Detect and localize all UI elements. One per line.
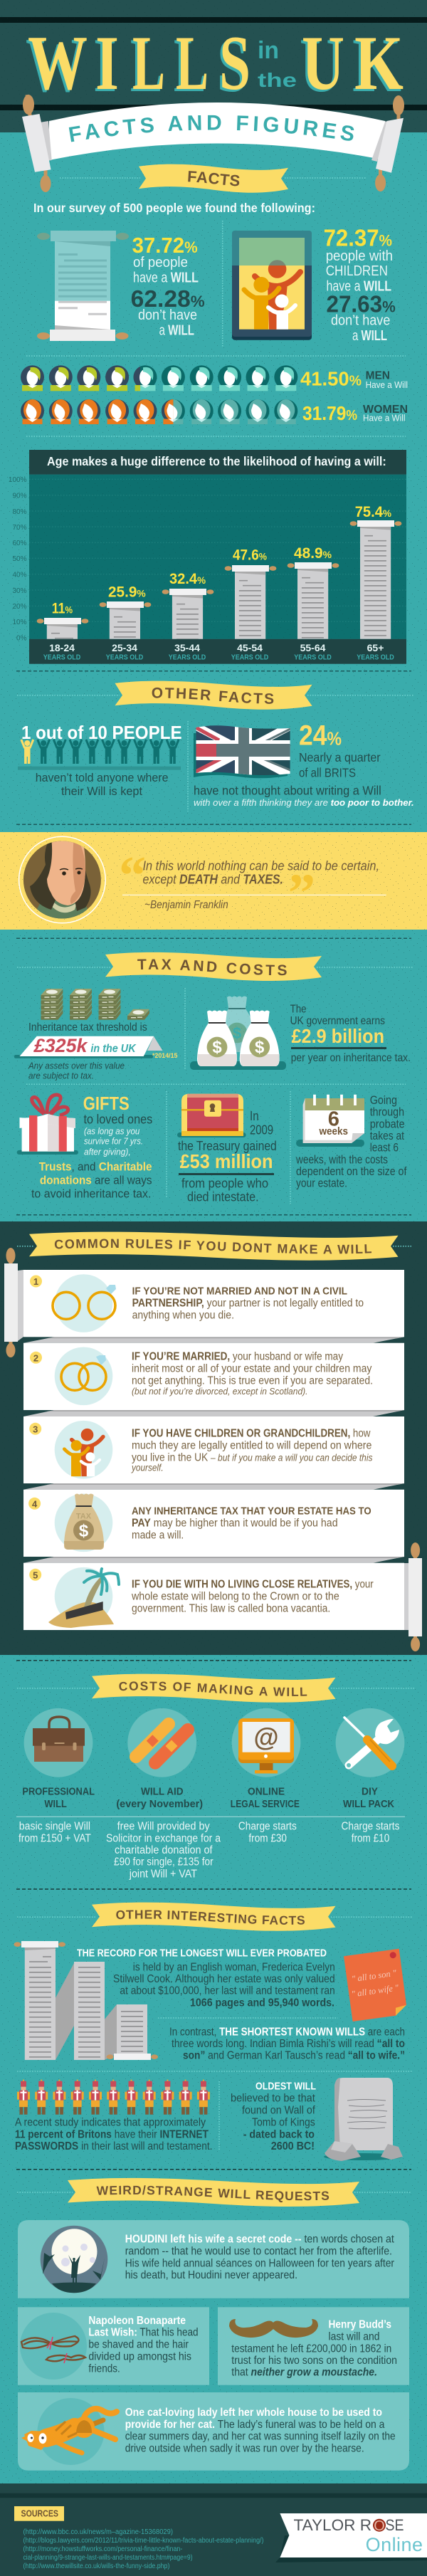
logo: Taylor Rose Online: O (374, 2518, 385, 2534)
icon: cat (21, 2409, 117, 2453)
heading banner: other interesting facts: OTHER INTERESTING FACTS (116, 1910, 305, 1925)
y axis labels (9, 476, 27, 642)
sources block: (http://www.thewillsite.co.uk/wills-the-funny-side.php) (23, 2562, 169, 2570)
stat: inheritance tax threshold: Any assets over this value (28, 1061, 125, 1071)
text: gifts trusts and charitable donations: to loved ones (84, 1113, 152, 1127)
cost option: professional will: from £150 + VAT (19, 1832, 91, 1844)
panel: Napoleon Bonaparte: be shaved and the hair (88, 2339, 189, 2351)
title: Wills in the UK: U (302, 20, 344, 106)
y axis labels: 10% (12, 619, 27, 626)
text: internet passwords: 11 percent of Britons have their INTERNET (15, 2128, 209, 2140)
icon: union flag (194, 722, 290, 779)
note: all to son, all to wife (344, 1949, 406, 2022)
title: Wills in the UK: the (258, 69, 297, 91)
panel: Henry Budd (218, 2307, 409, 2385)
cost option: will aid: Solicitor in exchange for a (106, 1832, 221, 1844)
stat: people with a will: have a WILL (133, 270, 199, 286)
panel: Henry Budd: Henry Budd’s (329, 2319, 391, 2331)
heading banner: other facts: OTHER FACTS (152, 688, 273, 704)
stat: 24 percent of Brits: of all BRITS (299, 766, 356, 780)
survey intro text: In our survey of 500 people we found the following: (33, 201, 315, 215)
rule 5: no close relatives (23, 1563, 404, 1630)
cost option: diy will pack: DIY (362, 1786, 378, 1798)
text: shortest wills (169, 2026, 405, 2062)
rule 4: inheritance tax: $ (79, 1522, 89, 1540)
quote: Benjamin Franklin: except DEATH and TAXES. (142, 872, 283, 887)
heading banner: costs of making a will (17, 1674, 414, 1703)
rule 4: inheritance tax: 4 (32, 1498, 38, 1509)
cost option: diy will pack (336, 1708, 404, 1844)
y axis labels: 60% (12, 540, 27, 547)
rule 4: inheritance tax (23, 1490, 404, 1557)
bar 25-34: 25.9%: 25.9% (108, 584, 146, 601)
cost option: professional will: PROFESSIONAL (22, 1786, 95, 1798)
quote: Benjamin Franklin: “ (119, 846, 146, 905)
cost option: online legal service (231, 1708, 300, 1844)
heading banner: weird strange will requests (17, 2178, 410, 2207)
logo: Taylor Rose Online: TAYLOR R (293, 2516, 371, 2534)
logo: Taylor Rose Online: SE (386, 2516, 404, 2534)
text: gifts trusts and charitable donations: donations are all ways (40, 1173, 152, 1187)
rule 5: no close relatives: whole estate will belong to the Crown or to the (131, 1591, 339, 1603)
stat: 24 percent of Brits: 24% (299, 720, 342, 752)
rule 1: not married: IF YOU’RE NOT MARRIED AND NOT IN A CIVIL (132, 1285, 347, 1297)
chart title: Age makes a huge difference to the likelihood of having a will: (47, 454, 386, 468)
panel: Henry Budd: trust for his two sons on the condition (231, 2355, 397, 2367)
y axis labels: 20% (12, 603, 27, 611)
cost option: professional will (19, 1708, 95, 1844)
ribbon scroll: facts and figures: FACTS AND FIGURES (68, 115, 354, 142)
stat: people with children with a will: 27.63% (326, 290, 396, 317)
text: treasury gained 53 million: the Treasury gained (178, 1139, 277, 1153)
cost option: will aid: £90 for single, £135 for (114, 1856, 214, 1868)
cost option: professional will: basic single Will (19, 1821, 90, 1833)
icon: money bags (190, 997, 286, 1070)
heading banner: other interesting facts (17, 1902, 411, 1931)
quote: Benjamin Franklin: ~Benjamin Franklin (144, 899, 228, 911)
cost option: will aid (106, 1708, 221, 1881)
sources block (14, 2506, 263, 2570)
x axis labels: 25-34 (112, 642, 137, 653)
stat: inheritance tax threshold: Inheritance tax threshold is (28, 1021, 147, 1034)
cost option: will aid: charitable donation of (115, 1844, 213, 1856)
cost option: will aid: (every November) (116, 1798, 203, 1810)
icon: tablet with family (229, 228, 315, 340)
bar 65+: 75.4% (350, 504, 401, 639)
heading banner: facts: FACTS (188, 171, 239, 186)
text: longest will: is held by an English woman, Frederica Evelyn (133, 1961, 335, 1973)
x axis labels: YEARS OLD (294, 653, 332, 662)
panel: Napoleon Bonaparte: divided up amongst his (88, 2351, 191, 2363)
heading banner: facts (60, 164, 366, 193)
rule 2: married: 2 (33, 1352, 38, 1363)
x axis labels: YEARS OLD (357, 653, 394, 662)
sources block: SOURCES (21, 2509, 58, 2519)
cost option: will aid: WILL AID (141, 1786, 184, 1798)
text: longest will: THE RECORD FOR THE LONGEST WILL EVER PROBATED (77, 1947, 327, 1959)
text: shortest wills: three words long. Indian Bimla Rishi’s will read “all to (172, 2038, 405, 2050)
stat: 2.9 billion: The (290, 1004, 307, 1016)
bar 55-64: 48.9% (288, 545, 339, 639)
icon: stacks of banknotes (41, 989, 149, 1020)
icon: money bags: $ (255, 1038, 265, 1057)
right roller (403, 1542, 422, 1651)
cost option: diy will pack: WILL PACK (343, 1798, 394, 1810)
stat: 2.9 billion (290, 1004, 411, 1064)
text: probate takes six weeks: weeks, with the costs (295, 1153, 388, 1166)
left roller (4, 1248, 23, 1357)
panel: Napoleon Bonaparte: friends. (88, 2362, 120, 2375)
stat: 24 percent of Brits: Nearly a quarter (299, 750, 381, 764)
stat: 2.9 billion: per year on inheritance tax. (291, 1052, 411, 1064)
y axis labels: 40% (12, 571, 27, 579)
x axis labels: 45-54 (237, 642, 263, 653)
bar 25-34: 25.9% (100, 584, 151, 639)
icon: computer monitor: @ (253, 1723, 279, 1752)
quote: Benjamin Franklin: ” (288, 863, 315, 923)
rule 5: no close relatives: government. This law is called bona vacantia. (132, 1602, 330, 1614)
cost option: online legal service: ONLINE (248, 1786, 285, 1798)
rule 5: no close relatives: IF YOU DIE WITH NO LIVING CLOSE RELATIVES, your (132, 1579, 374, 1591)
note: all to son, all to wife: " all to wife " (351, 1982, 400, 1999)
bar 45-54: 47.6% (225, 547, 276, 639)
text: gifts trusts and charitable donations: survive for 7 yrs. (84, 1136, 143, 1147)
x axis labels: 18-24 (49, 642, 75, 653)
rule 4: inheritance tax: TAX (76, 1512, 92, 1520)
sign: 325k threshold (14, 1035, 162, 1058)
icon: calendar six weeks: 6 (328, 1108, 339, 1131)
text: probate takes six weeks: your estate. (296, 1177, 347, 1190)
stat: inheritance tax threshold: are subject to tax. (28, 1071, 94, 1081)
panel: cat-loving lady: provide for her cat. The lady’s funeral was to be held on a (125, 2419, 384, 2431)
icon: treasure chest (177, 1094, 246, 1137)
text: oldest will: found on Wall of (242, 2104, 315, 2116)
rule 5: no close relatives: 5 (33, 1570, 38, 1580)
panel: Napoleon Bonaparte (18, 2307, 209, 2385)
y axis labels: 80% (12, 508, 27, 516)
rule 1: not married: 1 (33, 1276, 38, 1287)
rule 1: not married: PARTNERSHIP, your partner is not legally entitled to (132, 1297, 364, 1309)
pictogram: ten people (18, 740, 181, 770)
icon: gift box (17, 1095, 78, 1155)
text: gifts trusts and charitable donations (31, 1093, 152, 1201)
folds between panels (23, 1337, 404, 1563)
stat: men: Have a Will (366, 380, 408, 390)
panel: Henry Budd: last will and (329, 2331, 380, 2343)
logo: Taylor Rose Online: Online (366, 2534, 423, 2555)
sources block: (http://www.bbc.co.uk/news/m–agazine-15368029) (23, 2528, 173, 2536)
text: longest will: 1066 pages and 95,940 words. (190, 1997, 334, 2009)
title: Wills in the UK: K (354, 20, 404, 106)
bar 55-64: 48.9%: 48.9% (294, 545, 332, 562)
stat: women: WOMEN (363, 404, 408, 416)
stat: women: Have a Will (363, 414, 406, 424)
text: gifts trusts and charitable donations: Trusts, and Charitable (39, 1160, 152, 1173)
stat: 2.9 billion: UK government earns (290, 1015, 385, 1027)
cost option: online legal service: LEGAL SERVICE (231, 1798, 300, 1810)
icon: plasters (136, 1724, 188, 1763)
y axis labels: 0% (16, 635, 27, 642)
rule 2: married: IF YOU’RE MARRIED, your husband or wife may (132, 1351, 343, 1363)
text: longest will (77, 1947, 335, 2009)
quote: Benjamin Franklin (119, 846, 386, 923)
cost option: will aid: free Will provided by (117, 1821, 210, 1833)
x axis labels: 55-64 (300, 642, 326, 653)
text: oldest will: Tomb of Kings (252, 2116, 315, 2128)
panel: Napoleon Bonaparte: Napoleon Bonaparte (88, 2315, 186, 2327)
title: Wills in the UK: W (28, 20, 88, 106)
title: Wills in the UK: in (258, 37, 279, 64)
panel: Houdini: HOUDINI left his wife a secret code -- ten words chosen at (125, 2234, 394, 2246)
stat: inheritance tax threshold (14, 1021, 178, 1081)
x axis labels: YEARS OLD (231, 653, 269, 662)
title: Wills in the UK (28, 20, 404, 106)
stat: people with children with a will: people with (326, 248, 393, 264)
text: oldest will: 2600 BC! (271, 2140, 315, 2152)
bar 35-44: 32.4% (162, 571, 214, 639)
text: treasury gained 53 million: died intestate. (187, 1189, 259, 1204)
stat: people with a will: 62.28% (131, 285, 205, 312)
sources block: (http://blogs.lawyers.com/2012/11/trivia-time-little-known-facts-about-estate-planning/) (23, 2537, 263, 2545)
bar 35-44: 32.4%: 32.4% (169, 571, 206, 587)
text: shortest wills: In contrast, THE SHORTEST KNOWN WILLS are each (169, 2026, 405, 2038)
text: probate takes six weeks (295, 1094, 407, 1190)
title: Wills in the UK: L (176, 20, 209, 106)
stat: 2.9 billion: £2.9 billion (292, 1025, 384, 1047)
stat: men: 41.50% (300, 368, 362, 390)
stat: 1 out of 10 people: their Will is kept (61, 784, 142, 798)
rule 4: inheritance tax: made a will. (132, 1529, 184, 1541)
text: gifts trusts and charitable donations: after giving), (84, 1146, 131, 1157)
rule 3: children or grandchildren: IF YOU HAVE CHILDREN OR GRANDCHILDREN, how (132, 1427, 371, 1439)
rule 1: not married (23, 1270, 404, 1337)
bar 65+: 75.4%: 75.4% (355, 504, 392, 520)
cost option: professional will: WILL (44, 1798, 67, 1810)
stat: 24 percent of Brits: with over a fifth thinking they are too poor to bother. (194, 797, 414, 808)
text: oldest will: - dated back to (243, 2128, 315, 2140)
pictogram: eleven toy soldiers (17, 2080, 210, 2115)
text: treasury gained 53 million: from people who (181, 1176, 268, 1190)
rule 2: married (23, 1343, 404, 1410)
scroll with five rules (4, 1248, 422, 1651)
cost option: online legal service: from £30 (248, 1832, 287, 1844)
rule 2: married: inherit most or all of your estate and your children may (132, 1363, 372, 1375)
title: Wills in the UK: S (219, 20, 251, 106)
icon: bundles of hair (21, 2336, 85, 2363)
x axis labels: 35-44 (174, 642, 200, 653)
stat: people with children with a will: have a WILL (326, 279, 391, 295)
text: probate takes six weeks: probate (370, 1118, 405, 1130)
y axis labels: 30% (12, 587, 27, 595)
icon: will scroll 37.72 percent fill (36, 228, 131, 341)
heading banner: common rules (17, 1231, 411, 1261)
panel: Houdini: random -- that he would use to contact her from the afterlife. (125, 2246, 392, 2258)
stat: women: 31.79% (302, 402, 357, 424)
text: shortest wills: son” and German Karl Tausch’s read “all to wife.” (183, 2050, 405, 2062)
text: probate takes six weeks: takes at (370, 1130, 404, 1142)
text: internet passwords: PASSWORDS in their last will and testament. (15, 2140, 212, 2152)
icon: briefcase (33, 1717, 85, 1762)
bar chart: age and likelihood of having a will (9, 450, 406, 664)
stat: 24 percent of Brits: have not thought about writing a Will (194, 784, 381, 798)
sources block: (http://money.howstuffworks.com/personal-finance/finan- (23, 2545, 182, 2553)
rule 3: children or grandchildren: much they are legally entitled to will depend on where (132, 1439, 371, 1451)
bar 18-24: 11% (37, 601, 88, 639)
text: probate takes six weeks: dependent on the size of (296, 1165, 407, 1178)
text: probate takes six weeks: Going (370, 1094, 397, 1107)
x axis labels (43, 642, 394, 662)
text: longest will: Stilwell Cook. Although her estate was only valued (113, 1973, 335, 1985)
y axis labels: 70% (12, 524, 27, 532)
icon: wrench and screwdriver (344, 1718, 399, 1767)
text: treasury gained 53 million: 2009 (250, 1123, 273, 1137)
pictogram row: women (21, 399, 297, 424)
icon: money bags: $ (212, 1038, 222, 1057)
stat: women (302, 402, 408, 424)
stat: people with children with a will (324, 225, 396, 344)
heading banner: other facts (17, 680, 413, 710)
stat: people with children with a will: 72.37% (324, 225, 392, 251)
stat: people with a will: 37.72% (132, 233, 198, 258)
icon: stone tablet (324, 2078, 403, 2161)
icon: calendar six weeks: weeks (319, 1126, 348, 1137)
text: gifts trusts and charitable donations: (as long as you (84, 1125, 139, 1136)
stat: 1 out of 10 people (18, 722, 182, 798)
stat: inheritance tax threshold: *2014/15 (152, 1052, 178, 1059)
stat: people with a will: of people (133, 255, 188, 270)
icon: moustache (229, 2319, 318, 2338)
title: Wills in the UK: I (95, 20, 119, 106)
text: treasury gained 53 million: In (250, 1109, 259, 1123)
rule 4: inheritance tax: PAY may be higher than it would be if you had (132, 1517, 338, 1529)
text: probate takes six weeks: through (370, 1106, 404, 1119)
y axis labels: 50% (12, 555, 27, 563)
bar 45-54: 47.6%: 47.6% (233, 547, 267, 564)
stat: 1 out of 10 people: 1 out of 10 PEOPLE (21, 722, 182, 743)
y axis labels: 90% (12, 493, 27, 500)
stat: people with a will: don’t have (138, 307, 197, 323)
x axis labels: YEARS OLD (106, 653, 144, 662)
panel: Henry Budd: that neither grow a moustache. (231, 2367, 377, 2379)
panel: Houdini: his death, but Houdini never appeared. (125, 2269, 297, 2281)
text: gifts trusts and charitable donations: GIFTS (83, 1093, 130, 1114)
stat: men: MEN (366, 370, 390, 382)
pictogram row: men (21, 365, 297, 391)
stat: 24 percent of Brits (194, 720, 414, 808)
y axis labels: 100% (9, 476, 27, 484)
text: gifts trusts and charitable donations: to avoid inheritance tax. (31, 1187, 151, 1201)
heading banner: tax and costs: TAX AND COSTS (137, 960, 287, 975)
stat: people with a will: a WILL (159, 323, 194, 339)
panel: Henry Budd: testament he left £200,000 in 1862 in (231, 2343, 391, 2355)
rule 3: children or grandchildren (23, 1416, 404, 1483)
stat: men (300, 368, 408, 390)
panel: Napoleon Bonaparte: Last Wish: That his head (88, 2327, 199, 2339)
sources block: cial-planning/9-strange-last-wills-and-testaments.htm#page=9) (23, 2554, 193, 2562)
x axis labels: YEARS OLD (169, 653, 206, 662)
rule 3: children or grandchildren: you live in the UK – but if you make a will you can decide this (132, 1451, 373, 1463)
text: internet passwords (15, 2117, 212, 2152)
quote: Benjamin Franklin: In this world nothing can be said to be certain, (142, 858, 379, 873)
rule 2: married: not get anything. This is true even if you are separated. (132, 1375, 373, 1387)
cost option: online legal service: Charge starts (238, 1821, 297, 1833)
text: longest will: at about $100,000, her last will and testament ran (120, 1985, 335, 1997)
heading banner: costs of making a will: COSTS OF MAKING A WILL (119, 1681, 307, 1696)
ribbon scroll: facts and figures (22, 94, 404, 192)
text: treasury gained 53 million: £53 million (180, 1150, 273, 1172)
icon: calendar six weeks (296, 1095, 364, 1147)
rule 4: inheritance tax: ANY INHERITANCE TAX THAT YOUR ESTATE HAS TO (132, 1505, 371, 1517)
x axis labels: 65+ (367, 642, 384, 653)
stat: people with children with a will: don’t have (331, 313, 390, 329)
text: oldest will: believed to be that (231, 2093, 315, 2105)
text: treasury gained 53 million (178, 1109, 277, 1204)
icon: moon and silhouette (41, 2226, 107, 2293)
bar 18-24: 11%: 11% (52, 601, 73, 617)
rule 2: married: (but not if you’re divorced, except in Scotland). (132, 1386, 307, 1397)
sign: 325k threshold: in the UK (90, 1043, 137, 1055)
stat: people with children with a will: CHILDREN (326, 263, 388, 279)
icon: very long will on three sheets (14, 1941, 158, 2060)
logo: Taylor Rose Online (275, 2513, 427, 2562)
cost option: diy will pack: from £10 (352, 1832, 390, 1844)
rule 3: children or grandchildren: yourself. (131, 1463, 164, 1473)
text: probate takes six weeks: least 6 (370, 1142, 399, 1155)
panel: Houdini (18, 2220, 409, 2298)
sign: 325k threshold: £325k (33, 1035, 88, 1056)
note: all to son, all to wife: " all to son " (351, 1968, 398, 1984)
text: oldest will (231, 2081, 316, 2152)
rule 3: children or grandchildren: 3 (33, 1424, 38, 1434)
heading banner: tax and costs (17, 952, 413, 981)
icon: computer monitor (238, 1718, 294, 1774)
rule 1: not married: anything when you die. (132, 1309, 234, 1321)
panel: cat-loving lady: drive outside when sadly it was run over by the hearse. (125, 2443, 364, 2455)
icon: money bags: $ (233, 1024, 241, 1042)
stat: people with a will (131, 233, 205, 339)
stat: 1 out of 10 people: haven’t told anyone where (36, 771, 169, 784)
cost option: will aid: joint Will + VAT (129, 1868, 197, 1881)
heading banner: weird strange will requests: WEIRD/STRANGE WILL REQUESTS (97, 2185, 329, 2202)
portrait: Benjamin Franklin (19, 836, 105, 925)
panel: cat-loving lady (18, 2392, 409, 2471)
title: Wills in the UK: L (132, 20, 165, 106)
stat: people with children with a will: a WILL (352, 328, 387, 344)
cost option: diy will pack: Charge starts (342, 1821, 400, 1833)
text: internet passwords: A recent study indicates that approximately (15, 2117, 206, 2129)
x axis labels: YEARS OLD (43, 653, 81, 662)
panel: cat-loving lady: One cat-loving lady left her whole house to be used to (125, 2407, 382, 2419)
text: oldest will: OLDEST WILL (255, 2081, 316, 2093)
heading banner: common rules: COMMON RULES IF YOU DONT MAKE A WILL (54, 1239, 371, 1254)
